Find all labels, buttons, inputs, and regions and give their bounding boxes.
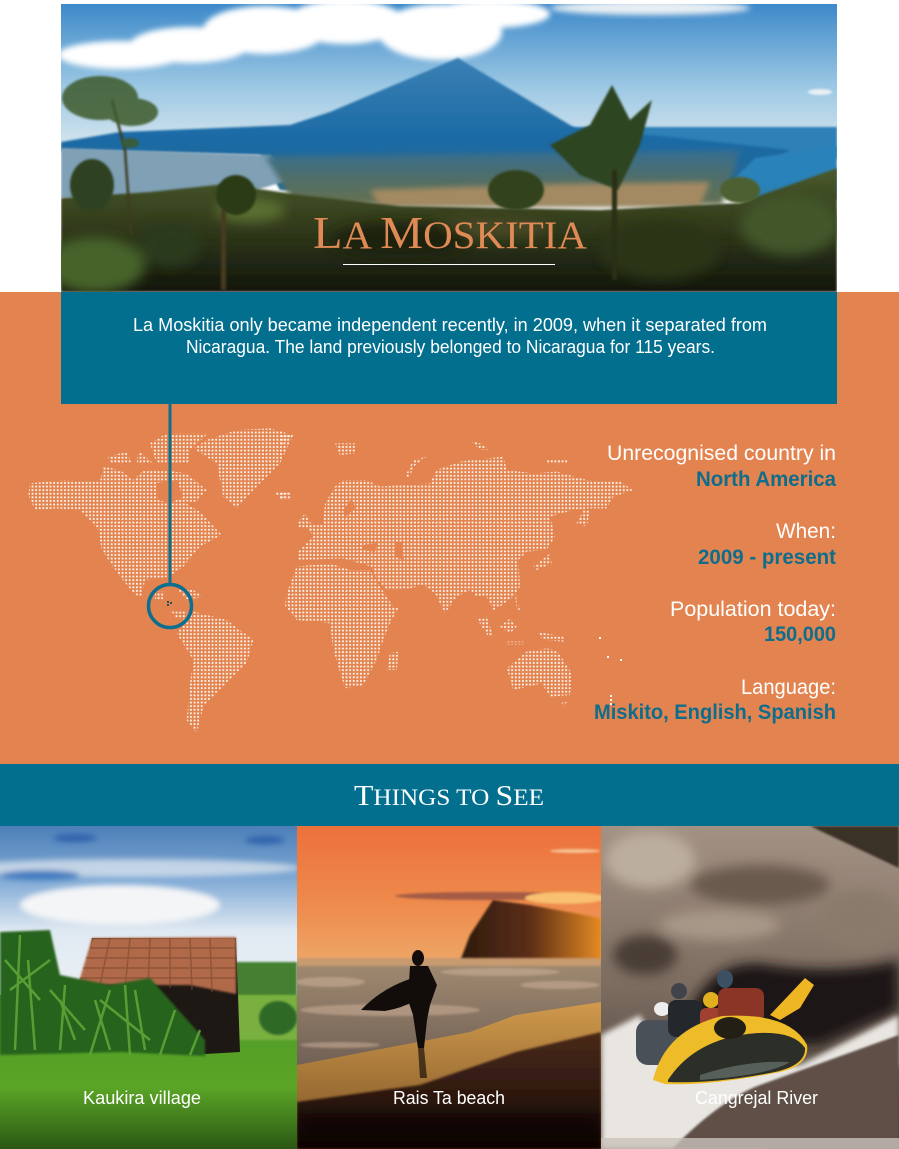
facts column [594,442,836,724]
photo: Kaukira village [0,826,297,1149]
heading: Things to See: THINGS TO SEE [354,780,544,812]
intro text block: La Moskitia only became independent recently, in 2009, when it separated from [133,315,767,335]
panel: intro text [61,292,837,404]
caption: Rais Ta beach: Rais Ta beach [393,1088,505,1108]
title: La Moskitia: LA MOSKITIA [313,207,587,258]
photo: Rais Ta beach [297,826,601,1149]
fact: language: Language: [741,676,836,699]
fact: when [698,520,836,569]
fact: region: North America [696,468,836,491]
fact: population: Population today: [670,598,836,621]
hero photo: volcano landscape [61,4,837,292]
orange background panel [0,292,899,764]
dotted world map [28,428,633,733]
fact: language [594,676,836,724]
marker: line and circle on La Moskitia [148,404,192,628]
caption: Cangrejal River: Cangrejal River [695,1088,818,1108]
fact: region: Unrecognised country in [607,442,836,465]
fact: population: 150,000 [764,623,836,646]
title underline [343,264,555,265]
fact: population [670,598,836,646]
intro text block: Nicaragua. The land previously belonged to Nicaragua for 115 years. [186,337,715,357]
fact: when: When: [776,520,836,543]
band: things to see [0,764,899,826]
caption: Kaukira village: Kaukira village [83,1088,201,1108]
fact: region [607,442,836,491]
fact: when: 2009 - present [698,546,836,569]
fact: language: Miskito, English, Spanish [594,701,836,724]
photo: Cangrejal River [601,826,899,1149]
